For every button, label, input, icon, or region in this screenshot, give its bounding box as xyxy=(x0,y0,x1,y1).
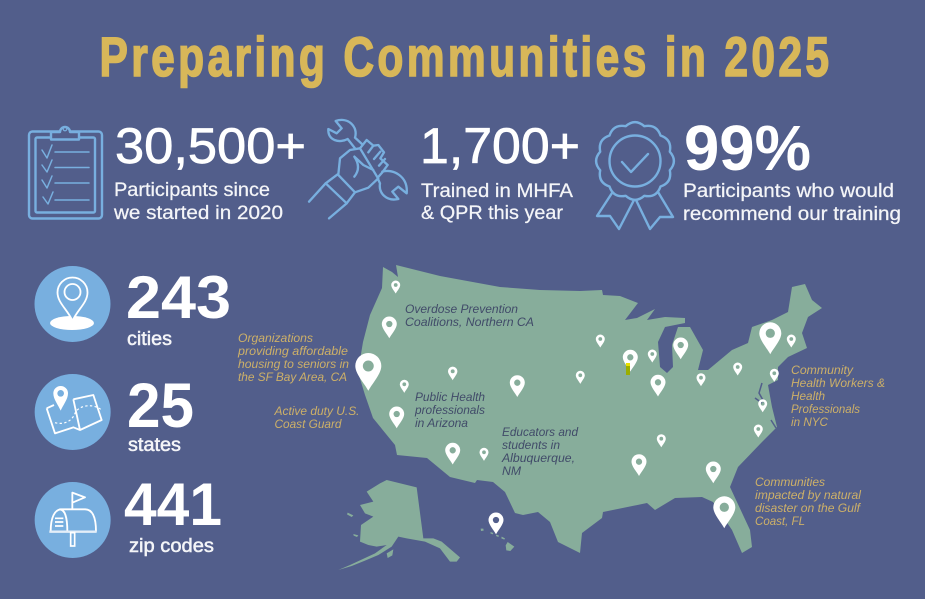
callout: Arizona: Public Health xyxy=(415,390,485,404)
label: zip codes xyxy=(129,536,214,557)
icon: location pin xyxy=(34,266,110,342)
caption: & QPR this year xyxy=(421,203,564,224)
stat: trained xyxy=(309,118,580,224)
caption xyxy=(113,180,283,224)
callout: Albuquerque: NM xyxy=(502,464,521,478)
caption xyxy=(421,181,573,224)
Alaska xyxy=(338,480,460,570)
callout: Arizona: professionals xyxy=(414,403,485,417)
number: 441 xyxy=(124,471,222,538)
stat: cities xyxy=(34,264,231,350)
callout: Gulf Coast: impacted by natural xyxy=(755,488,861,502)
callout: NYC xyxy=(791,363,885,429)
callout: NYC: Professionals xyxy=(791,402,860,416)
map of the United States xyxy=(338,265,822,570)
callout: Albuquerque: Educators and xyxy=(502,425,578,439)
callout: Arizona: in Arizona xyxy=(415,416,468,430)
stat: states xyxy=(35,371,194,456)
caption xyxy=(683,181,901,225)
callout: NYC: Health xyxy=(791,389,825,403)
callout: NYC: Community xyxy=(791,363,854,377)
callout: Albuquerque xyxy=(501,425,578,478)
icon: mailbox xyxy=(35,482,111,558)
callout: NYC: in NYC xyxy=(791,415,828,429)
icon: fist holding wrench xyxy=(309,120,407,218)
Chesapeake and coast inlets xyxy=(755,383,776,428)
caption: recommend our training xyxy=(683,204,901,225)
map pins xyxy=(355,280,796,534)
icon: folded map xyxy=(35,374,111,450)
icon: award rosette xyxy=(596,122,674,229)
callout: Gulf Coast: Communities xyxy=(755,475,825,489)
callout: Overdose Prevention: Coalitions, Northern CA xyxy=(405,315,534,329)
stat: participants xyxy=(29,118,306,224)
number: 30,500+ xyxy=(115,118,306,174)
callout: NYC: Health Workers & xyxy=(791,376,885,390)
contiguous states xyxy=(358,265,822,553)
callout: SF Bay Area: housing to seniors in xyxy=(238,357,349,371)
callout: Coast Guard xyxy=(274,404,360,431)
number: 1,700+ xyxy=(420,118,580,174)
title: Preparing Communities in 2025 xyxy=(100,25,829,88)
caption: Trained in MHFA xyxy=(421,181,573,202)
callout: Coast Guard: Coast Guard xyxy=(274,417,342,431)
callout: Gulf Coast: disaster on the Gulf xyxy=(755,501,862,515)
stat: recommend xyxy=(596,112,901,229)
callout: Albuquerque: students in xyxy=(502,438,560,452)
number: 25 xyxy=(127,371,194,441)
callout: SF Bay Area: the SF Bay Area, CA xyxy=(238,370,347,384)
callout: Arizona xyxy=(414,390,485,430)
callout: Coast Guard: Active duty U.S. xyxy=(274,404,360,418)
callout: SF Bay Area: providing affordable xyxy=(237,344,348,358)
caption: Participants who would xyxy=(683,181,894,202)
callout: Albuquerque: Albuquerque, xyxy=(501,451,575,465)
callout: SF Bay Area xyxy=(237,331,349,384)
label: cities xyxy=(127,329,172,350)
callout: Overdose Prevention xyxy=(405,302,534,329)
number: 243 xyxy=(126,264,231,331)
number: 99% xyxy=(684,112,811,184)
stat: zip codes xyxy=(35,471,222,558)
icon: clipboard xyxy=(29,127,102,218)
callout: SF Bay Area: Organizations xyxy=(238,331,313,345)
callout: Gulf Coast xyxy=(755,475,862,528)
Hawaii xyxy=(481,529,514,551)
caption: we started in 2020 xyxy=(113,203,283,224)
callout: Overdose Prevention: Overdose Prevention xyxy=(405,302,518,316)
callout: Gulf Coast: Coast, FL xyxy=(755,514,805,528)
caption: Participants since xyxy=(114,180,270,201)
label: states xyxy=(128,435,181,456)
